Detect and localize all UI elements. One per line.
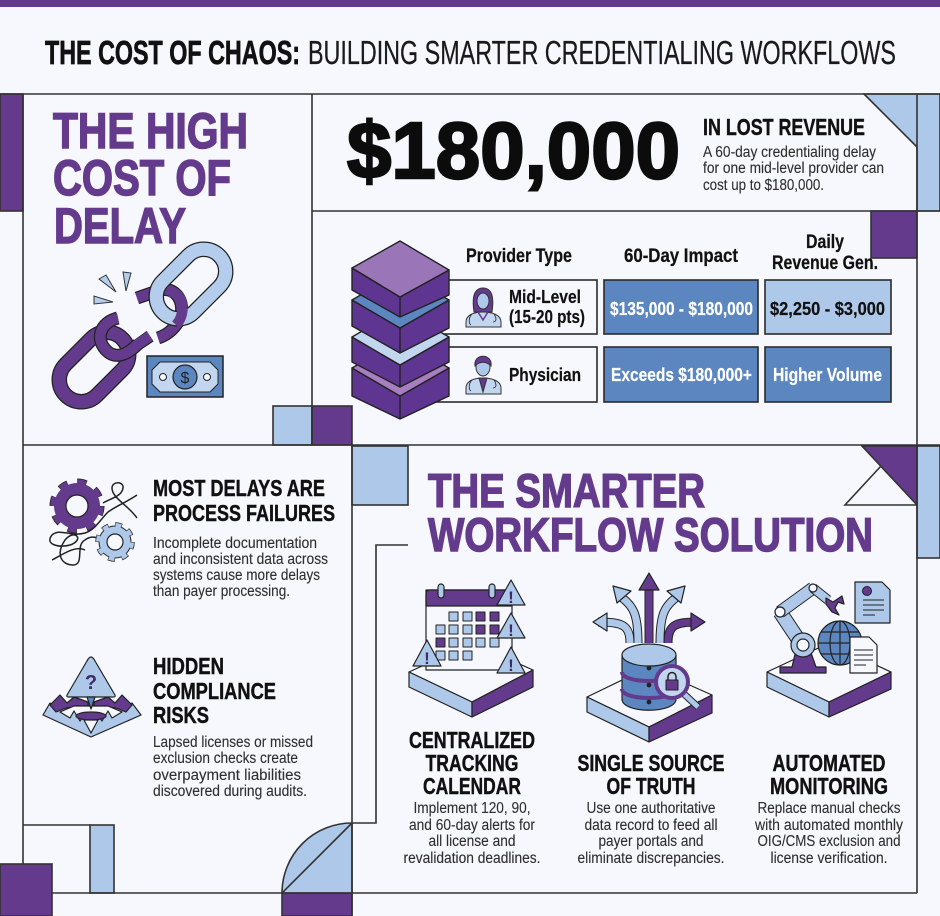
column: automated monitoring: MONITORING	[770, 773, 888, 799]
heading: the smarter workflow solution: THE SMARTER	[428, 464, 705, 517]
text block: compliance risks: discovered during audits.	[153, 783, 307, 800]
table headers: Daily	[806, 231, 844, 253]
text block: process failures: Incomplete documentation	[153, 535, 317, 552]
upper blue link	[147, 240, 235, 328]
icon: male physician	[466, 356, 501, 394]
column: single source of truth: Use one authoritative	[586, 800, 716, 817]
block 2	[352, 272, 449, 353]
dollar bill	[147, 356, 223, 397]
dollar bill: $	[181, 370, 190, 387]
column: centralized tracking calendar	[404, 727, 540, 867]
text block: compliance risks: Lapsed licenses or missed	[153, 734, 313, 751]
icon: stacked blocks	[352, 241, 449, 419]
blue document	[855, 582, 890, 623]
table row: physician: Exceeds $180,000+	[611, 365, 752, 385]
block 4	[352, 340, 449, 419]
table row: mid-level: (15-20 pts)	[509, 307, 585, 327]
white break gap	[116, 296, 148, 340]
column: centralized tracking calendar: revalidation deadlines.	[404, 850, 540, 867]
icon: tracking calendar: !	[508, 656, 514, 675]
data arrows	[598, 590, 698, 643]
table row: physician	[430, 347, 891, 402]
text block: compliance risks: overpayment liabilities	[153, 767, 301, 784]
column: centralized tracking calendar: CALENDAR	[423, 773, 521, 799]
column: centralized tracking calendar: CENTRALIZED	[409, 727, 535, 753]
table row: mid-level: $2,250 - $3,000	[770, 299, 885, 319]
block 1	[352, 241, 449, 317]
column: automated monitoring: with automated monthly	[754, 817, 903, 834]
icon: single source database	[587, 573, 712, 742]
white document	[850, 637, 877, 673]
icon: tracking calendar	[409, 580, 533, 717]
text block: process failures: MOST DELAYS ARE	[153, 475, 325, 501]
stat description: cost up to $180,000.	[703, 177, 824, 194]
table headers: Revenue Gen.	[772, 252, 878, 274]
text block: process failures: and inconsistent data across	[153, 551, 328, 568]
column: single source of truth	[578, 750, 724, 867]
icon: tracking calendar: !	[424, 649, 430, 668]
cylinder	[622, 655, 676, 710]
robot base	[780, 650, 826, 673]
platform	[767, 643, 891, 717]
column: automated monitoring: OIG/CMS exclusion and	[758, 833, 900, 850]
text block: process failures: systems cause more delays	[153, 567, 320, 584]
text block: compliance risks	[153, 653, 313, 800]
icon: female provider	[466, 288, 501, 327]
column: single source of truth: SINGLE SOURCE	[578, 750, 724, 776]
column: centralized tracking calendar: and 60-day alerts for	[409, 817, 535, 834]
text block: process failures	[153, 475, 335, 600]
warning triangles	[413, 580, 525, 673]
block 3	[352, 309, 449, 387]
magnifier and lock	[684, 694, 698, 707]
heading: the high cost of delay: COST OF	[53, 150, 231, 206]
broken middle link right piece	[137, 290, 182, 338]
column: centralized tracking calendar: all license and	[428, 833, 516, 850]
column: single source of truth: data record to feed all	[584, 817, 718, 834]
big stat: $180,000: $180,000	[347, 106, 680, 195]
column: centralized tracking calendar: TRACKING	[426, 750, 518, 776]
column: single source of truth: payer portals and	[598, 833, 704, 850]
column: automated monitoring: Replace manual checks	[758, 800, 901, 817]
icon: tracking calendar: !	[508, 588, 514, 607]
text block: compliance risks: HIDDEN	[153, 653, 224, 679]
text block: compliance risks: exclusion checks create	[153, 750, 298, 767]
column: automated monitoring	[754, 750, 903, 867]
icon: automated monitoring robot	[767, 582, 891, 717]
icon: bear trap with question mark: ?	[85, 672, 97, 694]
heading: the smarter workflow solution	[428, 464, 873, 561]
table row: physician: Higher Volume	[773, 365, 882, 385]
table row: physician: Physician	[509, 365, 581, 385]
icon: tracking calendar: !	[508, 621, 514, 640]
heading: the high cost of delay	[53, 103, 248, 254]
table row: mid-level	[430, 280, 891, 334]
column: single source of truth: eliminate discrepancies.	[578, 850, 724, 867]
table headers: 60-Day Impact	[624, 245, 738, 267]
platform	[587, 667, 712, 742]
platform	[409, 643, 533, 717]
lower purple link	[50, 323, 138, 411]
text block: process failures: than payer processing.	[153, 583, 290, 600]
stat description: IN LOST REVENUE	[703, 114, 865, 140]
stat description: for one mid-level provider can	[703, 160, 884, 177]
icon: bear trap with question mark	[43, 657, 141, 737]
title	[45, 34, 896, 71]
table row: mid-level: Mid-Level	[509, 287, 581, 307]
chain shards	[94, 272, 131, 304]
calendar body	[426, 590, 512, 670]
text block: process failures: PROCESS FAILURES	[153, 500, 335, 526]
heading: the high cost of delay: DELAY	[54, 198, 186, 254]
top bar	[0, 0, 940, 7]
column: centralized tracking calendar: Implement 120, 90,	[414, 800, 530, 817]
text block: compliance risks: COMPLIANCE	[153, 678, 276, 704]
title: THE COST OF CHAOS:	[45, 34, 300, 71]
stat description: A 60-day credentialing delay	[703, 144, 876, 161]
icon: gears and tangled lines	[50, 482, 137, 565]
column: automated monitoring: AUTOMATED	[772, 750, 886, 776]
globe	[818, 621, 862, 665]
table headers: Provider Type	[466, 245, 572, 267]
text block: compliance risks: RISKS	[153, 702, 209, 728]
heading: the high cost of delay: THE HIGH	[53, 103, 248, 159]
stat description	[703, 114, 884, 194]
icon: broken chain	[50, 240, 235, 411]
table row: mid-level: $135,000 - $180,000	[610, 299, 753, 319]
broken middle link left piece	[100, 318, 150, 355]
calendar grid	[436, 612, 499, 660]
robot arm	[780, 612, 802, 645]
column: automated monitoring: license verification.	[770, 850, 888, 867]
column: single source of truth: OF TRUTH	[606, 773, 696, 799]
table headers	[466, 231, 878, 274]
